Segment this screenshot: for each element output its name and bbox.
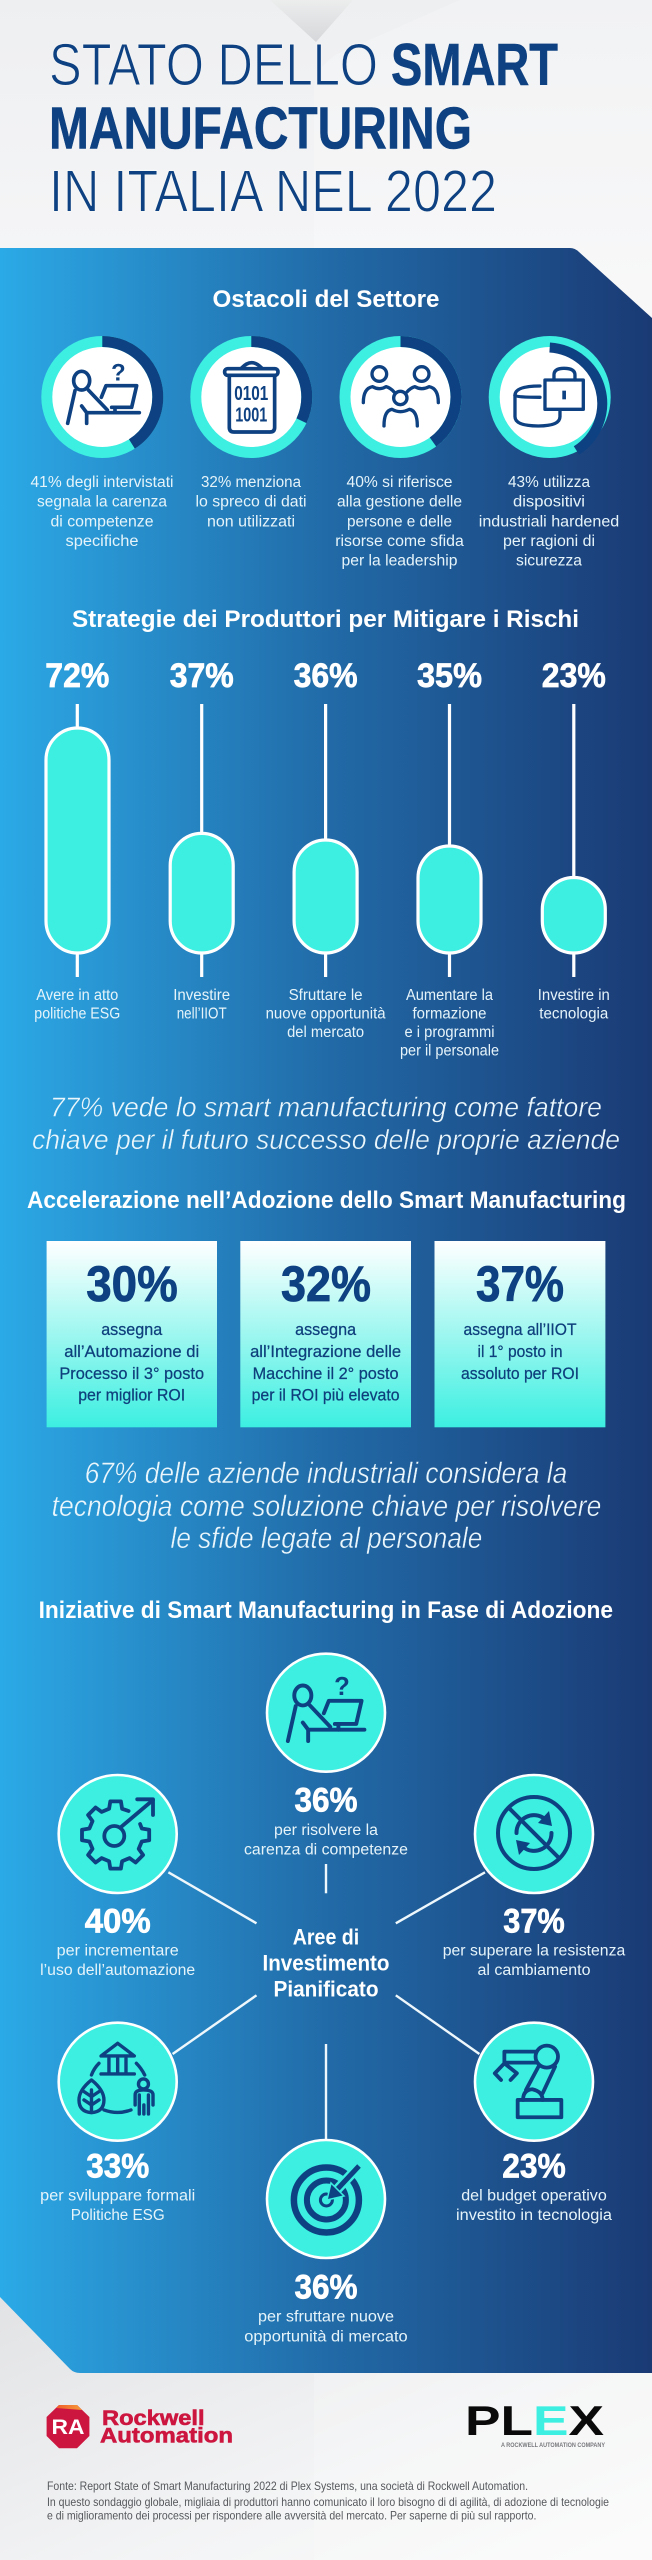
bar 23%	[538, 657, 610, 1022]
card 32%: 32%	[281, 1256, 371, 1312]
bar 72%: politiche ESG	[34, 1006, 120, 1022]
caption 40%: persone e delle	[347, 513, 452, 530]
heading: iniziative: Iniziative di Smart Manufacturing in Fase di Adozione	[39, 1597, 613, 1624]
icon: ESG temple leaf person	[79, 2043, 153, 2114]
connector lines	[168, 1864, 485, 2139]
bar 72%: 72%	[45, 657, 109, 695]
section: accelerazione	[27, 1187, 626, 1427]
card 37%: assoluto per ROI	[461, 1364, 579, 1383]
icon: trash bin with binary: 1001	[235, 404, 267, 427]
node: 37% resistenza: 37%	[503, 1902, 565, 1940]
node: 37% resistenza: al cambiamento	[478, 1962, 590, 1979]
card 32%: assegna	[295, 1320, 357, 1339]
donut 41%	[41, 336, 163, 458]
card 30%: per miglior ROI	[78, 1386, 185, 1405]
node: 23% budget: del budget operativo	[461, 2188, 607, 2205]
caption 41%: specifiche	[66, 533, 138, 550]
caption 40%: per la leadership	[342, 553, 458, 570]
bar 37%: 37%	[170, 657, 234, 695]
card 30%: assegna	[101, 1320, 163, 1339]
node: 33% ESG: Politiche ESG	[71, 2207, 165, 2224]
logo: Rockwell Automation: Rockwell	[102, 2407, 205, 2430]
card 32%	[240, 1241, 411, 1427]
logo: Rockwell Automation: Automation	[100, 2425, 233, 2448]
card 30%	[47, 1241, 217, 1427]
node: 33% ESG: per sviluppare formali	[40, 2188, 195, 2205]
section: strategie	[34, 606, 610, 1059]
title	[49, 32, 558, 224]
icon: no change	[498, 1797, 570, 1869]
card 37%: 37%	[476, 1256, 564, 1312]
logo: Plex: A ROCKWELL AUTOMATION COMPANY	[501, 2442, 606, 2449]
statement 67%: le sfide legate al personale	[170, 1522, 482, 1555]
node: 23% budget: 23%	[502, 2147, 566, 2185]
caption 41%	[30, 474, 174, 550]
donut 32%	[190, 336, 312, 458]
node: 36% opportunita: 36%	[294, 2268, 358, 2306]
bar 37%: nell’IIOT	[177, 1006, 227, 1022]
hub: aree di investimento: Aree di	[293, 1924, 359, 1949]
node: 23% budget	[456, 2023, 612, 2224]
icon: person at desk: ?	[334, 1673, 350, 1701]
card 37%: il 1° posto in	[478, 1342, 562, 1361]
bar 23%: tecnologia	[539, 1006, 609, 1022]
caption 43%: dispositivi	[513, 494, 585, 511]
caption 41%: segnala la carenza	[37, 494, 167, 511]
node: 40% automazione: l’uso dell’automazione	[40, 1962, 195, 1979]
node: 36% competenze: per risolvere la	[274, 1822, 378, 1839]
bar 36%: 36%	[294, 657, 358, 695]
caption 40%: 40% si riferisce	[346, 474, 452, 491]
bar 37%	[170, 657, 234, 1022]
icon: gear with arrow	[82, 1799, 153, 1869]
icon: trash bin with binary: 0101	[234, 382, 268, 405]
card 30%: all’Automazione di	[64, 1342, 199, 1361]
hub: aree di investimento	[262, 1924, 390, 2002]
caption 43%: industriali hardened	[479, 513, 619, 530]
heading: accelerazione: Accelerazione nell’Adozione dello Smart Manufacturing	[27, 1187, 626, 1214]
bar 36%	[266, 657, 386, 1041]
bar 35%: 35%	[417, 657, 482, 695]
hub: aree di investimento: Investimento	[262, 1951, 390, 1976]
logo: Rockwell Automation	[47, 2405, 233, 2448]
icon: robot arm	[495, 2046, 561, 2117]
icon: person at desk	[288, 1673, 364, 1741]
title: MANUFACTURING	[49, 96, 472, 162]
caption 41%: 41% degli intervistati	[30, 474, 174, 491]
caption 43%: sicurezza	[516, 553, 582, 570]
bar 35%	[400, 657, 499, 1059]
bar 35%: formazione	[412, 1006, 486, 1022]
statement 67%: 67% delle aziende industriali considera la	[85, 1457, 567, 1490]
heading: ostacoli: Ostacoli del Settore	[212, 286, 440, 313]
bar 35%: Aumentare la	[406, 987, 493, 1004]
caption 32%: non utilizzati	[207, 513, 295, 530]
node: 23% budget: investito in tecnologia	[456, 2207, 612, 2224]
bar 35%: per il personale	[400, 1042, 499, 1059]
bar 37%: Investire	[173, 987, 230, 1004]
card 30%: Processo il 3° posto	[59, 1364, 204, 1383]
statement 77%	[32, 1092, 620, 1155]
icon: trash bin with binary	[225, 363, 278, 432]
node: 37% resistenza: per superare la resistenza	[443, 1943, 626, 1960]
caption 43%: per ragioni di	[503, 533, 595, 550]
bar 23%: 23%	[542, 657, 606, 695]
icon: three people	[363, 367, 438, 426]
bar 36%: nuove opportunità	[266, 1006, 386, 1022]
bar 36%: Sfruttare le	[289, 987, 363, 1004]
node: 33% ESG: 33%	[86, 2147, 149, 2185]
node: 36% competenze: 36%	[294, 1782, 358, 1820]
caption 32%: 32% menziona	[201, 474, 301, 491]
node: 36% opportunita	[244, 2140, 408, 2346]
bar 36%: del mercato	[287, 1024, 364, 1041]
bar 23%: Investire in	[538, 987, 610, 1004]
caption 32%	[196, 474, 306, 530]
caption 32%: lo spreco di dati	[196, 494, 306, 511]
caption 40%: alla gestione delle	[337, 494, 462, 511]
node: 36% competenze	[244, 1654, 408, 1858]
card 37%: assegna all’IIOT	[464, 1320, 576, 1339]
card 30%: 30%	[86, 1256, 178, 1312]
caption 41%: di competenze	[50, 513, 154, 530]
title: IN ITALIA NEL 2022	[49, 158, 497, 224]
icon: target with arrow	[294, 2166, 359, 2232]
bar 72%	[34, 657, 120, 1022]
statement 67%	[52, 1457, 601, 1555]
node: 40% automazione: per incrementare	[57, 1943, 179, 1960]
title: SMART	[391, 32, 558, 98]
footer source text	[47, 2479, 609, 2522]
card 32%: all’Integrazione delle	[250, 1342, 401, 1361]
logo: Rockwell Automation: RA	[52, 2416, 84, 2439]
donut 43%	[489, 336, 611, 458]
caption 40%	[335, 474, 464, 570]
logo: Plex: PL EX	[465, 2397, 604, 2444]
icon: database with lock	[515, 368, 583, 426]
icon: person at desk: ?	[111, 359, 126, 386]
footer source text: e di miglioramento dei processi per rispondere alle avversità del mercato. Per saperne di più sul rapporto.	[47, 2508, 536, 2522]
bar 72%: Avere in atto	[36, 987, 118, 1004]
bar 35%: e i programmi	[404, 1024, 494, 1041]
node: 40% automazione	[40, 1775, 195, 1979]
node: 40% automazione: 40%	[85, 1902, 151, 1940]
node: 36% opportunita: opportunità di mercato	[244, 2329, 408, 2346]
section: iniziative	[39, 1597, 626, 2346]
hub: aree di investimento: Pianificato	[274, 1977, 378, 2002]
statement 77%: chiave per il futuro successo delle proprie aziende	[32, 1124, 620, 1155]
card 37%	[434, 1241, 605, 1427]
heading: strategie: Strategie dei Produttori per Mitigare i Rischi	[72, 606, 579, 633]
node: 37% resistenza	[443, 1775, 626, 1979]
node: 36% opportunita: per sfruttare nuove	[258, 2309, 394, 2326]
card 32%: per il ROI più elevato	[252, 1386, 400, 1405]
node: 33% ESG	[40, 2023, 195, 2224]
caption 40%: risorse come sfida	[335, 533, 464, 550]
donut 40%	[340, 336, 462, 458]
title: STATO DELLO	[49, 32, 378, 98]
footer source text: Fonte: Report State of Smart Manufacturing 2022 di Plex Systems, una società di Rockwell Automation.	[47, 2479, 528, 2493]
caption 43%	[479, 474, 619, 570]
section: ostacoli del settore	[30, 286, 619, 570]
statement 77%: 77% vede lo smart manufacturing come fattore	[50, 1092, 602, 1123]
card 32%: Macchine il 2° posto	[253, 1364, 399, 1383]
caption 43%: 43% utilizza	[508, 474, 590, 491]
node: 36% competenze: carenza di competenze	[244, 1841, 408, 1858]
